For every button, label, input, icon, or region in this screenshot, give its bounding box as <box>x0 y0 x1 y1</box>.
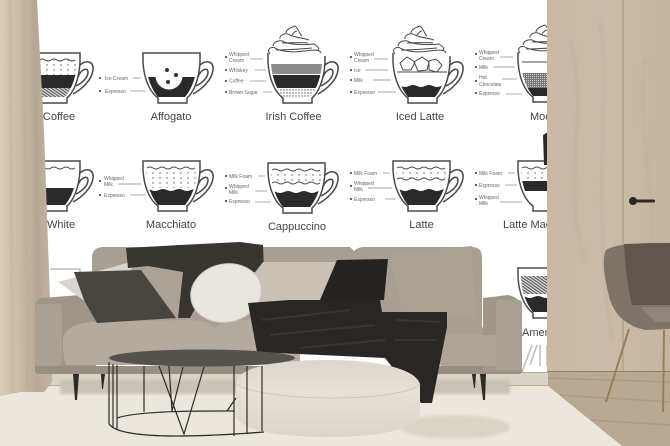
large right pillow <box>387 246 476 318</box>
legs <box>73 374 486 400</box>
labels: Macchiato: Milk <box>104 182 113 188</box>
name: Affogato: Affogato <box>151 111 191 123</box>
name: Latte Macchiato: Latte Macchiato <box>503 219 581 231</box>
labels: Macchiato: Espresso <box>104 193 125 199</box>
labels: Latte: Milk Foam <box>354 171 377 177</box>
labels: Irish Coffee <box>225 52 272 96</box>
right arm <box>483 295 522 372</box>
cup: Latte Macchiato <box>517 160 547 212</box>
labels: Latte: Whipped <box>354 181 374 187</box>
throw on sofa back <box>126 242 264 318</box>
sofa <box>35 242 522 403</box>
left arm <box>35 295 96 366</box>
labels: Mocha <box>475 50 522 97</box>
name: Americano: Americano <box>522 327 575 339</box>
cup: third row left <box>50 269 80 290</box>
labels: Iced Latte: Ice <box>354 68 361 74</box>
sofa base <box>35 366 522 374</box>
floor <box>0 372 670 446</box>
labels: Affogato: Ice Cream <box>105 76 128 82</box>
labels: Latte: Espresso <box>354 197 375 203</box>
labels: Iced Latte <box>350 52 396 96</box>
cup: Cappuccino <box>268 163 338 213</box>
labels: Mocha: Whipped <box>479 50 499 56</box>
labels: Cappuccino: Milk <box>229 190 238 196</box>
cup: Iced Latte <box>393 26 463 103</box>
labels: Macchiato <box>99 176 146 199</box>
cup: Mocha <box>517 24 547 103</box>
labels: Iced Latte: Whipped <box>354 52 374 58</box>
labels: Mocha: Cream <box>479 56 494 62</box>
dark square pillow <box>320 259 388 300</box>
sliver above Latte Macchiato <box>543 132 548 165</box>
labels: Irish Coffee: Coffee <box>229 78 244 84</box>
armchair <box>604 243 670 412</box>
labels: Irish Coffee: Brown Sugar <box>229 90 258 96</box>
labels: Latte Macchiato: Milk <box>479 201 488 207</box>
cup: Flat White <box>45 160 94 212</box>
wall background <box>0 0 548 374</box>
cup: Coffee <box>40 52 94 104</box>
name: Mocha: Mocha <box>530 111 564 123</box>
seat front <box>440 335 496 366</box>
cup: Affogato <box>143 53 213 103</box>
labels: Latte Macchiato: Milk Foam <box>479 171 502 177</box>
wood wall panels <box>547 0 670 372</box>
left seat cushion <box>63 320 216 365</box>
name: Irish Coffee: Irish Coffee <box>265 111 322 123</box>
labels: Irish Coffee: Whiskey <box>229 68 248 74</box>
labels: Cappuccino <box>225 174 271 205</box>
cup: Latte <box>393 161 463 211</box>
chair legs <box>606 329 664 412</box>
sofa back <box>92 247 482 330</box>
labels: Latte Macchiato: Espresso <box>479 183 500 189</box>
beige pillow <box>230 262 338 310</box>
labels: Latte <box>350 171 396 203</box>
right seat cushion <box>208 320 300 365</box>
labels: Macchiato: Whipped <box>104 176 124 182</box>
round white pillow <box>185 257 267 329</box>
name: Flat White: White <box>47 219 75 231</box>
name: Latte: Latte <box>409 219 434 231</box>
labels: Mocha: Milk <box>479 65 488 71</box>
name: Macchiato: Macchiato <box>146 219 196 231</box>
coffee wallpaper <box>40 24 547 372</box>
labels: Irish Coffee: Whipped <box>229 52 249 58</box>
labels: Cappuccino: Whipped <box>229 184 249 190</box>
door handle <box>629 197 655 205</box>
labels: Iced Latte: Milk <box>354 78 363 84</box>
cup: Macchiato <box>143 161 213 211</box>
pouf shadow on rug <box>400 415 510 439</box>
labels: Cappuccino: Espresso <box>229 199 250 205</box>
name: Iced Latte: Iced Latte <box>396 111 444 123</box>
sofa shadow on rug <box>60 380 510 394</box>
rug <box>0 386 622 446</box>
pale pillow behind <box>58 260 138 312</box>
labels: Cappuccino: Milk Foam <box>229 174 252 180</box>
cup: Americano <box>517 267 547 319</box>
knitted blanket <box>248 300 447 403</box>
labels: Latte Macchiato: Whipped <box>479 195 499 201</box>
labels: Affogato: Espresso <box>105 89 126 95</box>
back cushion left <box>130 262 186 318</box>
curtain <box>0 0 52 396</box>
pouf <box>236 360 420 437</box>
coffee table <box>109 350 295 436</box>
labels: Iced Latte: Cream <box>354 58 369 64</box>
labels: Latte: Milk <box>354 187 363 193</box>
labels: Irish Coffee: Cream <box>229 58 244 64</box>
labels: Mocha: Chocolate <box>479 82 502 88</box>
labels: Iced Latte: Espresso <box>354 90 375 96</box>
cup: Irish Coffee <box>268 26 338 103</box>
faint letters under Americano <box>522 345 547 372</box>
labels: Latte Macchiato <box>475 171 522 207</box>
labels: Mocha: Espresso <box>479 91 500 97</box>
labels: Mocha: Hot <box>479 75 487 81</box>
labels: Affogato <box>99 76 146 95</box>
name: Coffee: Coffee <box>43 111 75 123</box>
dark pillow <box>74 270 176 323</box>
name: Cappuccino: Cappuccino <box>268 221 326 233</box>
